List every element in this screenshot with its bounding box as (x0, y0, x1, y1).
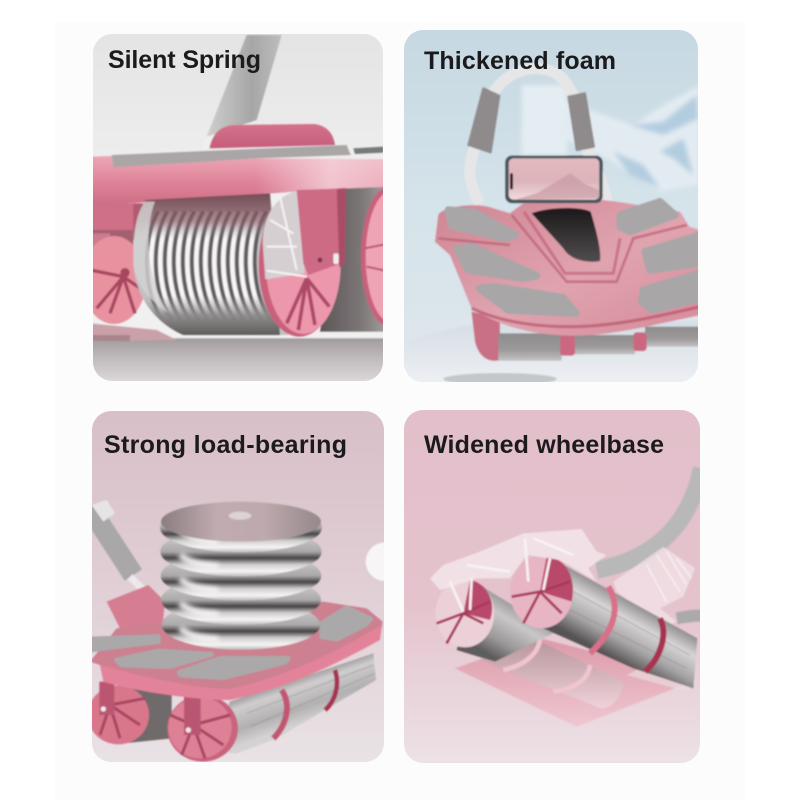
foam pads (90, 608, 371, 678)
spring cylinder (133, 193, 288, 335)
pink floor (455, 638, 700, 727)
pink platform (90, 602, 383, 698)
phone tray window (532, 208, 600, 262)
rear wheel right (319, 186, 383, 333)
clear rear platform (613, 547, 695, 627)
floor (404, 323, 698, 382)
right cylinder (510, 555, 697, 688)
panel: silent spring (93, 34, 383, 381)
heading: thickened foam: Thickened foam (424, 47, 616, 75)
heading: widened wheelbase: Widened wheelbase (424, 431, 664, 459)
handle (202, 35, 282, 149)
curved handle (597, 468, 702, 618)
floor reflection (480, 637, 700, 708)
tilted handle (92, 500, 145, 590)
pink base (435, 200, 700, 336)
arched handle (468, 68, 607, 203)
wheel disc with clear top (259, 191, 341, 337)
weight plates (160, 502, 322, 650)
white ball (366, 542, 404, 581)
panel: widened wheelbase (404, 410, 702, 763)
snowy mountains (522, 85, 700, 192)
rollers (472, 312, 700, 361)
backrest (107, 585, 165, 635)
panel: strong load-bearing (88, 411, 404, 762)
heading: silent spring: Silent Spring (108, 46, 261, 74)
brackets (99, 682, 201, 735)
floor (90, 323, 390, 383)
front wheel disc (167, 695, 238, 762)
foam pads (448, 202, 700, 313)
rear wheel left (93, 202, 144, 325)
foam pad (112, 145, 351, 167)
front cylinder (210, 653, 376, 753)
phone tray rim (524, 212, 620, 273)
panel: thickened foam (400, 30, 705, 385)
left cylinder (436, 579, 557, 662)
infographic (92, 30, 700, 763)
clear front platform (430, 529, 607, 612)
wheel bracket (297, 188, 346, 275)
rear wheel (88, 686, 172, 744)
platform top edge (90, 156, 390, 206)
phone (505, 156, 603, 203)
heading: strong load-bearing: Strong load-bearing (104, 431, 347, 459)
backrest (209, 124, 335, 148)
